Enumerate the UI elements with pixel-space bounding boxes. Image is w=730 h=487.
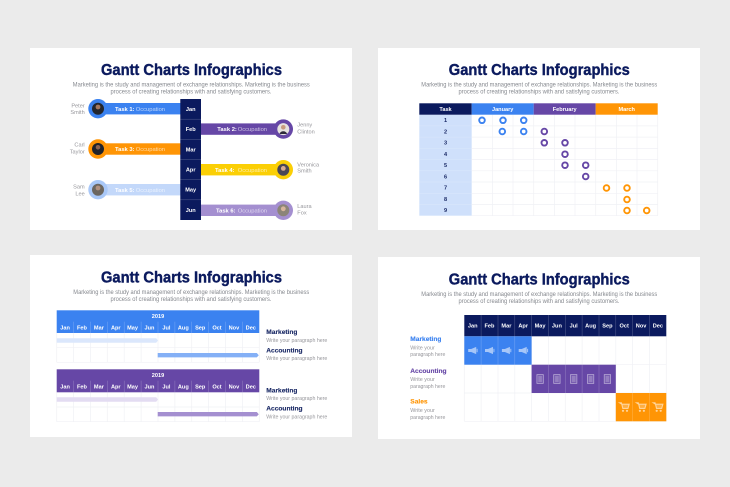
chart header: Task (439, 107, 453, 113)
orange markers (604, 185, 650, 213)
task column shading (419, 115, 472, 216)
blue chart labels (266, 329, 327, 362)
department labels: Write your (410, 377, 435, 383)
month header: Sep (602, 324, 613, 330)
blue gantt chart: Jun (145, 325, 155, 331)
person names (70, 103, 320, 217)
row numbers: 7 (444, 186, 447, 192)
department labels: Sales (410, 398, 428, 406)
purple gantt chart: Mar (94, 384, 105, 390)
task 1 bar (88, 99, 181, 118)
task 4 bar: Task 4: (215, 168, 235, 174)
task 1 bar: Occupation (136, 107, 165, 113)
month header (464, 315, 666, 336)
month header: Jul (570, 324, 578, 330)
task 4 bar: Occupation (238, 168, 267, 174)
task 3 bar (88, 139, 181, 159)
row numbers: 8 (444, 197, 447, 203)
purple gantt chart: 2019 (152, 373, 164, 379)
grid (464, 336, 666, 421)
title: Gantt Charts Infographics (449, 272, 630, 288)
person names: Taylor (70, 149, 85, 155)
month header: Apr (518, 324, 529, 330)
person names: Lee (75, 191, 85, 197)
purple gantt chart: May (127, 384, 139, 390)
department labels: Write your (410, 408, 435, 414)
month header: Jan (468, 324, 478, 330)
chart header: February (553, 107, 578, 113)
task 4 bar (200, 160, 293, 179)
month header: Nov (636, 324, 647, 330)
month column: Feb (186, 127, 196, 133)
task 2 bar (200, 119, 293, 139)
row numbers: 5 (444, 163, 447, 169)
blue gantt chart: Nov (229, 325, 240, 331)
purple gantt chart: Nov (229, 384, 240, 390)
subtitle: process of creating relationships with and satisfying customers. (458, 90, 620, 96)
person names: Clinton (297, 129, 315, 135)
task 5 bar: Occupation (136, 188, 165, 194)
department labels: paragraph here (410, 415, 445, 421)
row numbers: 3 (444, 141, 447, 147)
department labels: Accounting (410, 368, 447, 375)
person names: Peter (71, 103, 85, 109)
month column: Mar (186, 147, 196, 153)
chart header: January (492, 107, 514, 113)
row numbers: 2 (444, 129, 447, 135)
sales block (616, 393, 666, 421)
title: Gantt Charts Infographics (449, 62, 630, 79)
task 3 bar: Occupation (136, 147, 165, 153)
month header: Aug (585, 324, 597, 330)
purple gantt chart: Dec (246, 384, 256, 390)
month header: Feb (485, 324, 495, 330)
subtitle (73, 290, 309, 303)
purple gantt chart: Jun (145, 384, 155, 390)
blue gantt chart: May (127, 325, 139, 331)
blue gantt chart: Aug (178, 325, 189, 331)
subtitle (73, 82, 310, 96)
subtitle: process of creating relationships with and satisfying customers. (110, 90, 272, 96)
row numbers: 1 (444, 118, 447, 124)
blue gantt chart: Dec (246, 325, 256, 331)
task 6 bar (200, 201, 293, 220)
task 5 bar: Task 5: (115, 188, 135, 194)
blue chart labels: Marketing (266, 329, 297, 336)
department labels: Marketing (410, 336, 441, 343)
purple chart labels: Marketing (266, 387, 297, 394)
person names: Smith (297, 169, 312, 175)
blue gantt chart: Mar (94, 325, 105, 331)
month header: Jun (552, 324, 562, 330)
subtitle: Marketing is the study and management of exchange relationships. Marketing is the business (73, 290, 309, 296)
purple chart labels: Accounting (266, 406, 303, 413)
purple gantt chart: Jul (162, 384, 171, 390)
task 2 bar: Occupation (238, 127, 267, 133)
month column (180, 99, 201, 220)
blue gantt chart: Oct (212, 325, 222, 331)
month header: Mar (501, 324, 512, 330)
accounting block (532, 365, 616, 393)
chart header (419, 103, 658, 115)
blue markers (479, 118, 526, 134)
purple gantt chart: Oct (212, 384, 222, 390)
task 2 bar: Task 2: (217, 127, 237, 133)
purple gantt chart: Aug (178, 384, 189, 390)
department labels: Write your (410, 346, 435, 352)
person names: Jenny (297, 123, 312, 129)
person names: Carl (74, 143, 85, 149)
title: Gantt Charts Infographics (101, 62, 282, 79)
panel: task dot chart (378, 48, 700, 230)
person names: Laura (297, 204, 312, 210)
blue chart labels: Accounting (266, 347, 303, 354)
blue gantt chart: Apr (111, 325, 121, 331)
blue gantt chart: Sep (195, 325, 206, 331)
chart header: March (618, 107, 636, 113)
month header: Oct (620, 324, 629, 330)
purple gantt chart (57, 369, 259, 422)
month column: Jan (186, 107, 196, 113)
blue chart labels: Write your paragraph here (266, 356, 327, 362)
row numbers: 4 (444, 152, 448, 158)
task 6 bar: Task 6: (216, 208, 236, 214)
month header: Dec (653, 324, 663, 330)
subtitle: Marketing is the study and management of exchange relationships. Marketing is the business (421, 292, 657, 298)
subtitle (421, 82, 657, 96)
blue gantt chart: 2019 (152, 314, 164, 320)
month column: Apr (186, 168, 196, 174)
purple gantt chart: Sep (195, 384, 206, 390)
person names: Fox (297, 211, 307, 217)
row numbers: 6 (444, 174, 447, 180)
purple gantt chart: Apr (111, 384, 121, 390)
blue chart labels: Write your paragraph here (266, 338, 327, 344)
month column: May (185, 188, 197, 194)
person names: Sam (73, 184, 85, 190)
task 1 bar: Task 1: (115, 107, 135, 113)
subtitle: process of creating relationships with and satisfying customers. (458, 299, 620, 305)
purple gantt chart: Jan (60, 384, 71, 390)
month header: May (535, 324, 546, 330)
blue gantt chart: Jan (60, 325, 71, 331)
row numbers: 9 (444, 208, 447, 214)
department labels (410, 336, 447, 421)
subtitle: Marketing is the study and management of exchange relationships. Marketing is the business (421, 82, 657, 88)
blue gantt chart (57, 310, 259, 362)
panel: department gantt (378, 257, 700, 439)
purple gantt chart: Feb (77, 384, 88, 390)
month column: Jun (186, 208, 196, 214)
purple chart labels (266, 387, 327, 420)
department labels: paragraph here (410, 384, 445, 390)
purple markers (542, 129, 588, 179)
marketing block (464, 336, 532, 365)
row numbers (444, 118, 448, 214)
task 6 bar: Occupation (238, 208, 267, 214)
panel: yearly gantt (30, 255, 352, 437)
department labels: paragraph here (410, 352, 445, 358)
blue gantt chart: Feb (77, 325, 88, 331)
task 3 bar: Task 3: (115, 147, 135, 153)
subtitle: process of creating relationships with and satisfying customers. (110, 297, 272, 303)
blue gantt chart: Jul (162, 325, 171, 331)
subtitle: Marketing is the study and management of exchange relationships. Marketing is the business (73, 82, 310, 88)
person names: Smith (70, 110, 85, 116)
person names: Veronica (297, 162, 320, 168)
task 5 bar (88, 180, 181, 199)
purple chart labels: Write your paragraph here (266, 414, 327, 420)
purple chart labels: Write your paragraph here (266, 396, 327, 402)
subtitle (421, 292, 657, 305)
title: Gantt Charts Infographics (101, 270, 282, 286)
panel: task timeline (30, 48, 352, 230)
